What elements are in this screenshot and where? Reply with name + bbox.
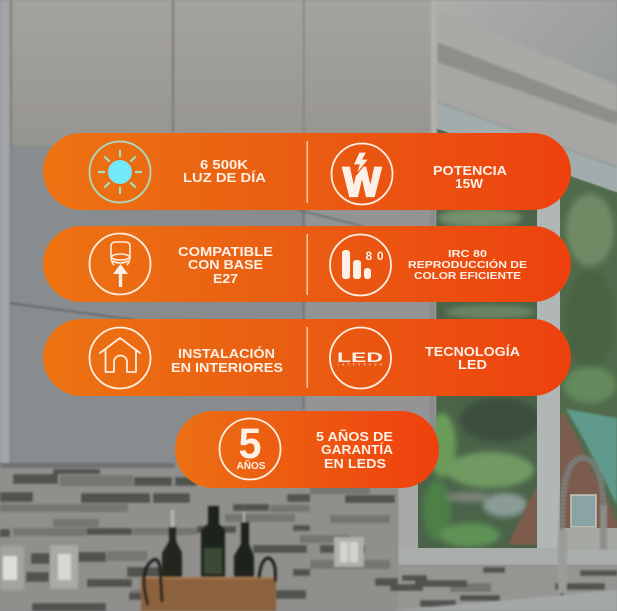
text: IRC 80 reproducción [408,248,527,282]
oil bottles and wooden crate [141,506,276,611]
tile backsplash [0,463,617,611]
text: 6 500K luz de día: 6 500K [200,158,248,172]
text: instalación en interiores: INSTALACIÓN [178,346,275,361]
icon: 5 años: 5 [238,420,262,468]
text: instalación en interiores [171,346,283,375]
text: tecnología LED: TECNOLOGÍA [425,344,520,359]
window with trees [398,120,617,565]
icon: IRC 80 bars [330,234,391,296]
wall outlets [0,537,364,590]
faucet [517,458,607,595]
pill: 6500K and potencia row [43,133,571,210]
text: IRC 80 reproducción: IRC 80 [448,248,487,260]
text: compatible con base E27: COMPATIBLE [178,245,273,259]
icon: house [90,328,150,388]
pill: compatible and IRC row [43,226,571,302]
text: compatible con base E27: E27 [213,272,238,286]
text: 6 500K luz de día [183,158,266,185]
text: compatible con base E27: CON BASE [188,258,263,272]
icon: sun [90,142,150,202]
text: IRC 80 reproducción: COLOR EFICIENTE [414,270,521,282]
text: compatible con base E27 [178,245,273,286]
icon: E27 bulb base [90,234,150,294]
upper cabinets [0,0,437,470]
text: tecnología LED [425,344,520,372]
icon: watts [332,144,392,205]
text: potencia 15W: 15W [455,177,483,191]
lower cabinets [10,146,436,464]
dividers [306,141,308,388]
icon: LED: LED [337,349,383,365]
text: potencia 15W: POTENCIA [433,164,507,178]
text: instalación en interiores: EN INTERIORES [171,361,283,375]
text: 5 años de garantía: EN LEDS [324,457,386,471]
text: 6 500K luz de día: LUZ DE DÍA [183,170,266,185]
pill: garantía [175,411,439,488]
text: tecnología LED: LED [458,358,487,372]
icon: watts: W [343,159,381,205]
text: 5 años de garantía [316,429,393,471]
pill: instalación and tecnología row [43,319,571,396]
icon: LED [330,328,391,388]
text: potencia 15W [433,164,507,191]
icon: LED: INTEGRADO [338,364,382,366]
text: 5 años de garantía: 5 AÑOS DE [316,429,393,444]
icon: 5 años: AÑOS [236,459,266,472]
ceiling and beams [436,0,617,192]
icon: 5 años [220,418,280,480]
text: 5 años de garantía: GARANTÍA [321,442,393,457]
text: IRC 80 reproducción: REPRODUCCIÓN DE [408,258,527,271]
icon: IRC 80 bars: 80 [366,249,384,263]
